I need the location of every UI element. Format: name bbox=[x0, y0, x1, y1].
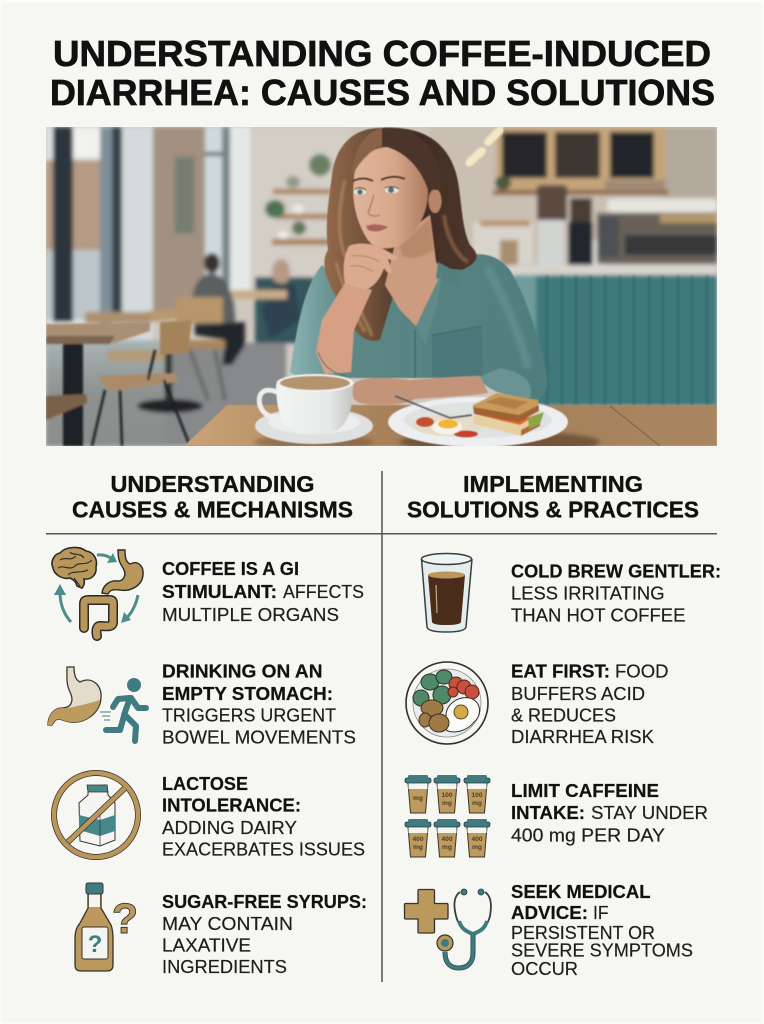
face bbox=[353, 147, 428, 248]
seated customers bbox=[255, 277, 315, 343]
blurred cafe background bbox=[46, 127, 717, 446]
icon: six caffeine cups: mg bbox=[442, 844, 452, 851]
title: UNDERSTANDING COFFEE-INDUCED bbox=[53, 33, 711, 74]
right column heading bbox=[407, 471, 699, 523]
raised forearm and hand bbox=[316, 283, 372, 374]
text: drinking on an empty stomach: DRINKING ON AN bbox=[162, 661, 322, 682]
icon: six caffeine cups: mg bbox=[472, 800, 482, 807]
text: cold brew gentler: LESS IRRITATING bbox=[511, 583, 664, 604]
text: seek medical advice: PERSISTENT OR bbox=[511, 922, 655, 943]
text: seek medical advice: IF bbox=[593, 902, 608, 923]
text: eat first: FOOD bbox=[615, 661, 668, 682]
section dividers bbox=[46, 471, 717, 982]
icon: brain, stomach and colon cycle bbox=[52, 547, 143, 636]
resting forearm and hand bbox=[352, 376, 488, 406]
icon: syrup bottle with question marks bbox=[75, 883, 138, 971]
text: seek medical advice: ADVICE: bbox=[511, 902, 588, 923]
text: sugar-free syrups: INGREDIENTS bbox=[162, 956, 287, 977]
photo: worried woman at a cafe table with coffee and breakfast bbox=[46, 127, 717, 453]
icon: six caffeine cups: 100 bbox=[471, 792, 483, 799]
icon: stomach and running figure bbox=[48, 667, 146, 741]
counter panel stripes bbox=[547, 276, 707, 405]
text: sugar-free syrups: SUGAR-FREE SYRUPS: bbox=[162, 891, 367, 912]
icon: syrup bottle with question marks: ? bbox=[112, 895, 138, 943]
icon: six caffeine cups: 400 bbox=[441, 836, 453, 843]
text: coffee is a GI stimulant: STIMULANT: bbox=[162, 581, 277, 602]
text: limit caffeine intake: 400 mg PER DAY bbox=[511, 825, 665, 846]
text: sugar-free syrups bbox=[162, 891, 367, 977]
table top bbox=[184, 405, 717, 446]
title bbox=[50, 33, 715, 113]
text: coffee is a GI stimulant: COFFEE IS A GI bbox=[162, 558, 299, 579]
text: limit caffeine intake bbox=[511, 780, 708, 846]
collar bbox=[436, 262, 450, 280]
text: sugar-free syrups: LAXATIVE bbox=[162, 935, 251, 956]
text: lactose intolerance: LACTOSE bbox=[162, 773, 248, 794]
hair bbox=[324, 128, 477, 341]
icon: medical cross and stethoscope bbox=[404, 889, 491, 968]
text: coffee is a GI stimulant: AFFECTS bbox=[283, 581, 364, 602]
icon: six caffeine cups: 100 bbox=[441, 792, 453, 799]
icon: six caffeine cups: 400 bbox=[471, 836, 483, 843]
text: drinking on an empty stomach: TRIGGERS URGENT bbox=[162, 705, 336, 726]
icon: six caffeine cups: mg bbox=[472, 844, 482, 851]
text: sugar-free syrups: MAY CONTAIN bbox=[162, 913, 293, 934]
text: limit caffeine intake: STAY UNDER bbox=[591, 802, 708, 823]
text: drinking on an empty stomach: BOWEL MOVEMENTS bbox=[162, 726, 356, 747]
icon: six caffeine cups: 400 bbox=[412, 836, 424, 843]
text: limit caffeine intake: LIMIT CAFFEINE bbox=[511, 780, 659, 801]
text: coffee is a GI stimulant bbox=[162, 558, 364, 625]
right column heading: IMPLEMENTING bbox=[463, 471, 643, 497]
woman bbox=[290, 128, 547, 406]
text: coffee is a GI stimulant: MULTIPLE ORGANS bbox=[162, 604, 339, 625]
breakfast plate with sandwich and egg bbox=[388, 393, 568, 447]
text: lactose intolerance: ADDING DAIRY bbox=[162, 817, 297, 838]
text: cold brew gentler: THAN HOT COFFEE bbox=[511, 605, 686, 626]
text: cold brew gentler bbox=[511, 561, 721, 626]
text: drinking on an empty stomach bbox=[162, 661, 356, 747]
icon: six caffeine cups: mg bbox=[413, 795, 423, 802]
left column heading bbox=[72, 471, 353, 523]
background table and chairs bbox=[146, 308, 178, 324]
title: DIARRHEA: CAUSES AND SOLUTIONS bbox=[50, 72, 715, 113]
left column heading: UNDERSTANDING bbox=[110, 471, 314, 497]
text: cold brew gentler: COLD BREW GENTLER: bbox=[511, 561, 721, 582]
icon: syrup bottle with question marks: ? bbox=[88, 931, 102, 958]
text: limit caffeine intake: INTAKE: bbox=[511, 802, 585, 823]
icon: glass of cold brew bbox=[422, 554, 472, 632]
icon: six caffeine cups: mg bbox=[413, 844, 423, 851]
right column heading: SOLUTIONS & PRACTICES bbox=[407, 497, 699, 523]
text: seek medical advice: SEEK MEDICAL bbox=[511, 881, 650, 902]
foreground chairs and table, left bbox=[46, 320, 192, 446]
left column heading: CAUSES & MECHANISMS bbox=[72, 497, 353, 523]
text: eat first: EAT FIRST: bbox=[511, 661, 610, 682]
text: seek medical advice bbox=[511, 881, 693, 979]
icon: milk carton prohibited bbox=[54, 773, 138, 857]
text: eat first: BUFFERS ACID bbox=[511, 683, 645, 704]
icon: six caffeine cups bbox=[405, 775, 490, 857]
coffee cup and saucer bbox=[255, 374, 373, 444]
back wall, boards and counter bbox=[430, 127, 717, 267]
text: seek medical advice: SEVERE SYMPTOMS bbox=[511, 940, 693, 961]
text: lactose intolerance: EXACERBATES ISSUES bbox=[162, 839, 365, 860]
text: drinking on an empty stomach: EMPTY STOMACH: bbox=[162, 683, 333, 704]
hanging lights bbox=[469, 130, 500, 163]
text: lactose intolerance bbox=[162, 773, 365, 860]
neck and chest bbox=[385, 215, 442, 326]
text: eat first: DIARRHEA RISK bbox=[511, 726, 655, 747]
text: seek medical advice: OCCUR bbox=[511, 958, 578, 979]
icon: six caffeine cups: mg bbox=[442, 800, 452, 807]
text: eat first: & REDUCES bbox=[511, 705, 616, 726]
text: eat first bbox=[511, 661, 668, 747]
text: lactose intolerance: INTOLERANCE: bbox=[162, 795, 301, 816]
icon: plate of food bbox=[406, 662, 488, 744]
